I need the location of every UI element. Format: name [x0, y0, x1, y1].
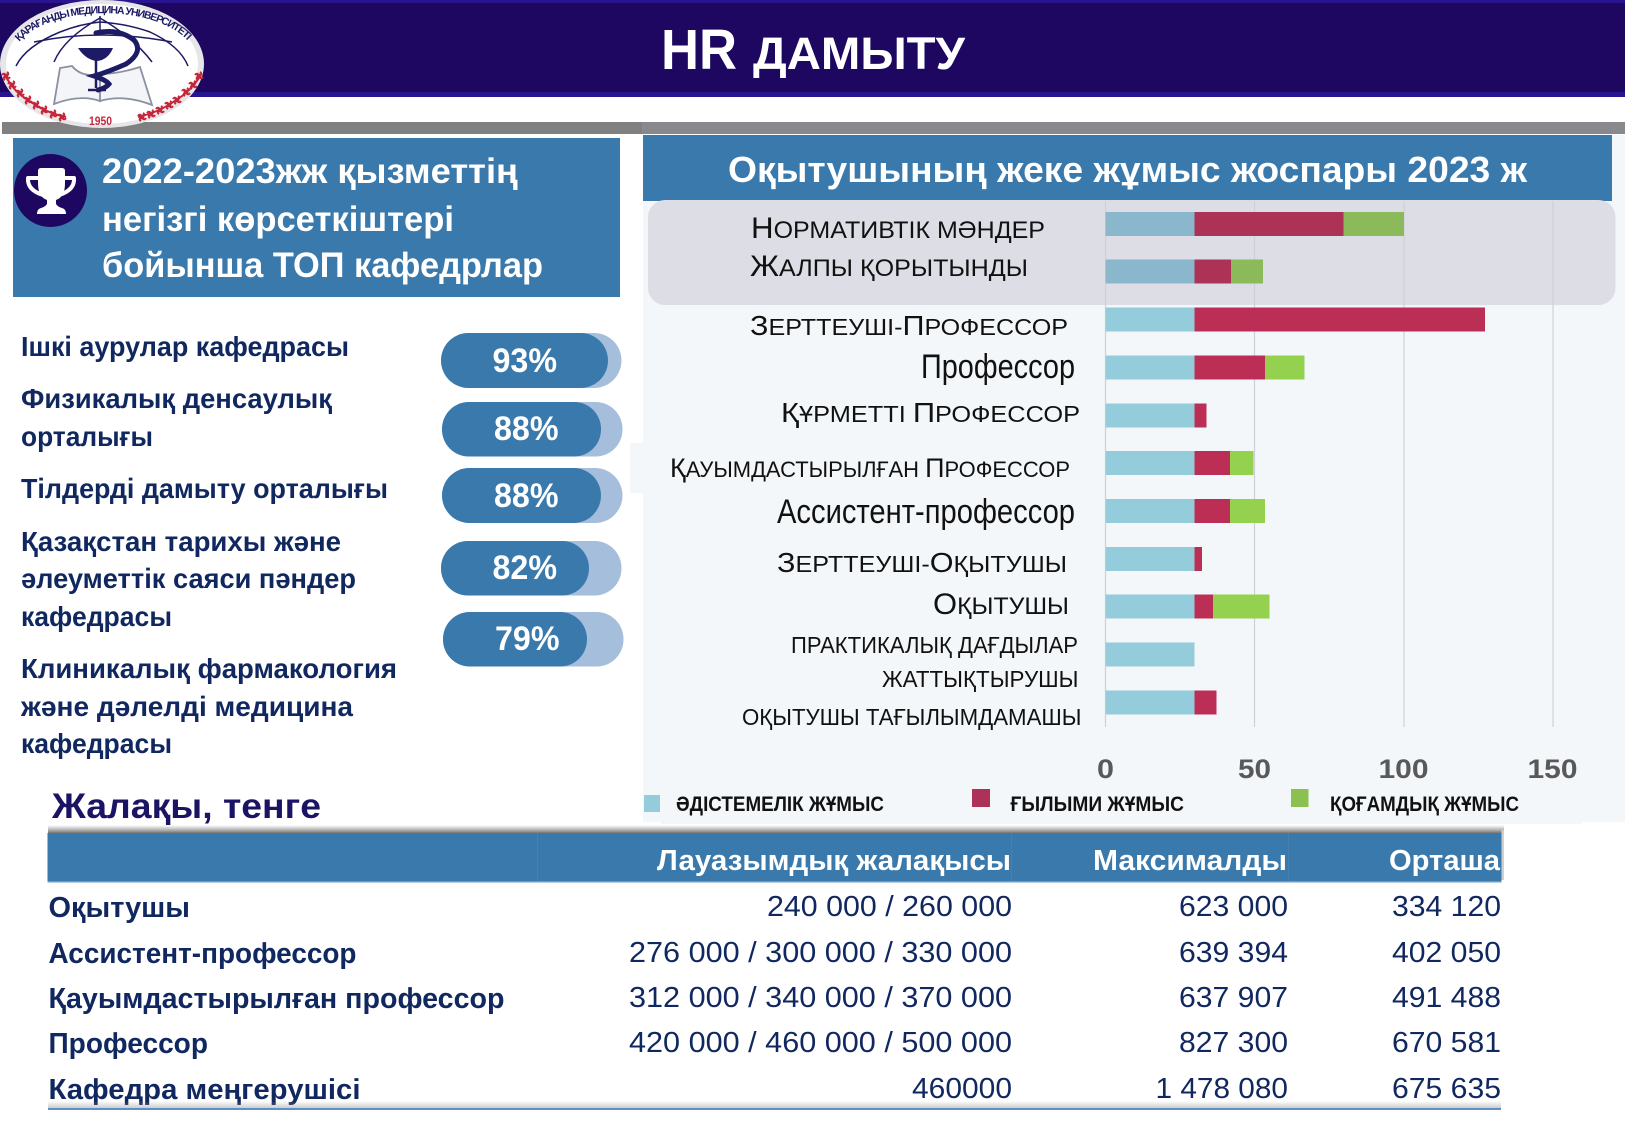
department 4 — [21, 526, 356, 632]
row: associate professor: 637 907 — [1179, 982, 1288, 1014]
department 2: орталығы — [21, 421, 153, 452]
row: lecturer: Оқытушы — [48, 892, 190, 924]
panel heading text: бойынша ТОП кафедрлар — [102, 246, 543, 285]
stacked bars — [1106, 212, 1485, 714]
percentage pills — [441, 333, 624, 666]
label: lecturer: ОҚЫТУШЫ — [933, 588, 1069, 621]
chart grid lines — [1106, 201, 1553, 727]
chart heading text: Оқытушының жеке жұмыс жоспары 2023 ж — [728, 149, 1527, 190]
title — [661, 18, 966, 82]
label: honorary professor: ҚҰРМЕТТІ ПРОФЕССОР — [781, 397, 1080, 428]
divider bar — [2, 122, 1625, 134]
label: professor: Профессор — [921, 348, 1075, 386]
label: trainer: ЖАТТЫҚТЫРУШЫ — [882, 666, 1078, 692]
label: associate professor: ҚАУЫМДАСТЫРЫЛҒАН ПРОФЕССОР — [670, 453, 1070, 483]
row: professor: 420 000 / 460 000 / 500 000 — [629, 1027, 1012, 1059]
department 4: әлеуметтік саяси пәндер — [21, 563, 356, 594]
highlighted summary block — [648, 200, 1616, 305]
department 2 — [21, 383, 333, 452]
department 5 — [20, 653, 397, 759]
panel: top departments heading — [13, 138, 620, 297]
department 5: кафедрасы — [21, 728, 172, 759]
row: assistant professor — [48, 937, 1501, 970]
row: head of department: Кафедра меңгерушісі — [48, 1074, 360, 1106]
row: lecturer: 334 120 — [1392, 891, 1501, 923]
icon: trophy — [14, 154, 87, 227]
bar: assistant professor — [1106, 499, 1265, 523]
x axis labels: 0 — [1097, 754, 1114, 784]
x axis labels: 100 — [1378, 754, 1428, 784]
legend: social work — [1291, 789, 1519, 816]
legend: scientific work — [972, 789, 1184, 816]
row: assistant professor: 639 394 — [1179, 937, 1288, 969]
salary table — [48, 825, 1504, 1110]
bar: normative values — [1106, 212, 1404, 236]
salary heading: Жалақы, тенге — [51, 787, 321, 826]
panel: work plan chart — [630, 135, 1625, 824]
pill 79% — [443, 612, 624, 666]
logo university name: ҚАРАҒАНДЫ МЕДИЦИНА УНИВЕРСИТЕТІ — [14, 6, 192, 42]
panel heading text: негізгі көрсеткіштері — [102, 200, 454, 239]
pill 88% second: 88% — [494, 477, 558, 515]
x axis labels: 50 — [1238, 754, 1271, 784]
pill 88% — [442, 402, 622, 456]
department 1: Ішкі аурулар кафедрасы — [21, 331, 349, 362]
logo globe lines — [16, 16, 188, 66]
department list — [20, 331, 397, 759]
label: practical skills: ПРАКТИКАЛЫҚ ДАҒДЫЛАР — [791, 632, 1078, 658]
panel heading text: 2022-2023жж қызметтің — [102, 152, 518, 191]
logo red ornaments — [2, 72, 203, 121]
row: head of department: 675 635 — [1392, 1073, 1501, 1105]
chart heading band — [643, 135, 1612, 201]
department 3: Тілдерді дамыту орталығы — [21, 473, 388, 504]
department 5: Клиникалық фармакология — [21, 653, 397, 684]
department 2: Физикалық денсаулық — [21, 383, 333, 414]
title: HR — [661, 18, 737, 82]
panel heading text — [102, 152, 543, 285]
label: overall total: ЖАЛПЫ ҚОРЫТЫНДЫ — [750, 250, 1028, 283]
pill 82%: 82% — [492, 549, 557, 587]
table header row: Максималды — [1093, 845, 1287, 877]
logo year: 1950 — [89, 114, 112, 128]
row: assistant professor: 276 000 / 300 000 / 330 000 — [629, 937, 1012, 969]
row: head of department: 460000 — [912, 1073, 1012, 1105]
row: professor: 670 581 — [1392, 1027, 1501, 1059]
icon: university logo — [0, 0, 204, 128]
row: professor: Профессор — [48, 1028, 208, 1060]
row: lecturer: 623 000 — [1179, 891, 1288, 923]
bar: research professor — [1106, 308, 1485, 332]
pill 93%: 93% — [492, 342, 557, 380]
department 4: кафедрасы — [21, 601, 172, 632]
bar: associate professor — [1106, 451, 1254, 475]
pill 88%: 88% — [494, 410, 558, 448]
department 5: және дәлелді медицина — [20, 691, 353, 722]
row: professor: 827 300 — [1179, 1027, 1288, 1059]
table header row: Лауазымдық жалақысы — [657, 845, 1011, 877]
row: associate professor: Қауымдастырылған профессор — [48, 983, 504, 1015]
bar: overall total — [1106, 260, 1263, 284]
row: associate professor: 491 488 — [1392, 982, 1501, 1014]
logo bowl and snake — [78, 32, 138, 90]
row: head of department — [48, 1073, 1501, 1106]
label: research professor: ЗЕРТТЕУШІ- ПРОФЕССОР — [750, 310, 1068, 341]
category labels — [670, 212, 1082, 730]
legend: social work: ҚОҒАМДЫҚ ЖҰМЫС — [1330, 793, 1519, 816]
row: lecturer — [48, 891, 1501, 924]
title: ДАМЫТУ — [753, 28, 966, 79]
label: normative values: НОРМАТИВТІК МӘНДЕР — [751, 212, 1045, 245]
bar: practical skills trainer — [1106, 642, 1194, 666]
bar: lecturer — [1106, 594, 1270, 618]
pill 79%: 79% — [495, 620, 560, 658]
row: head of department: 1 478 080 — [1156, 1073, 1288, 1105]
pill 82% — [441, 541, 622, 596]
header band — [0, 0, 1625, 97]
row: assistant professor: Ассистент-профессор — [48, 938, 356, 970]
pill 88% second — [442, 468, 622, 523]
logo book — [54, 66, 152, 105]
row: professor — [48, 1027, 1501, 1060]
pill 93% — [441, 333, 622, 388]
row: associate professor — [48, 982, 1501, 1015]
legend: methodological work: ӘДІСТЕМЕЛІК ЖҰМЫС — [676, 793, 884, 816]
row: lecturer: 240 000 / 260 000 — [767, 891, 1012, 923]
label: lecturer intern: ОҚЫТУШЫ ТАҒЫЛЫМДАМАШЫ — [742, 704, 1082, 730]
label: assistant professor: Ассистент-профессор — [777, 493, 1075, 531]
table header row — [48, 833, 1502, 882]
bar: honorary professor — [1106, 404, 1206, 428]
legend: scientific work: ҒЫЛЫМИ ЖҰМЫС — [1010, 793, 1184, 816]
x axis labels — [1097, 754, 1578, 784]
table header row: Орташа — [1389, 845, 1501, 877]
x axis labels: 150 — [1528, 754, 1578, 784]
label: research lecturer: ЗЕРТТЕУШІ- ОҚЫТУШЫ — [777, 547, 1067, 578]
bar: research lecturer — [1106, 547, 1202, 571]
bar: lecturer intern — [1106, 690, 1216, 714]
row: assistant professor: 402 050 — [1392, 937, 1501, 969]
department 4: Қазақстан тарихы және — [21, 526, 341, 557]
row: associate professor: 312 000 / 340 000 / 370 000 — [629, 982, 1012, 1014]
chart legend — [644, 789, 1519, 816]
bar: professor — [1106, 356, 1304, 380]
